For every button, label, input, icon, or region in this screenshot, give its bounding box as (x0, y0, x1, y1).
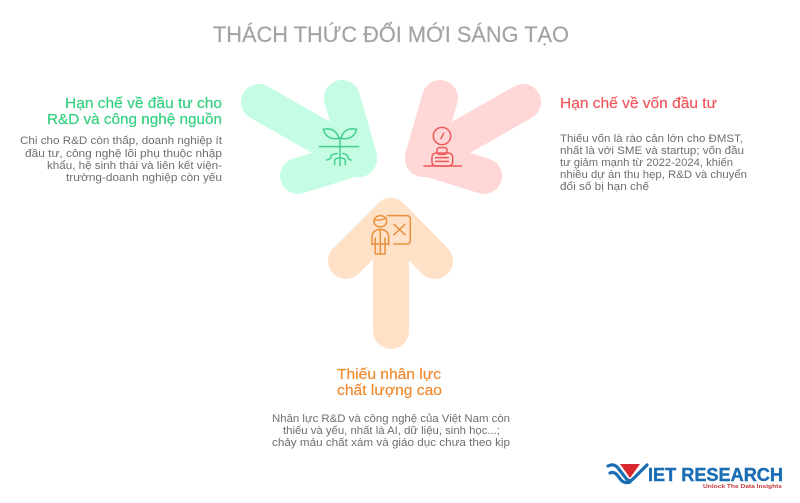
text block: green heading: Hạn chế về đầu tư cho (65, 95, 222, 112)
text block: orange heading: chất lượng cao (337, 382, 442, 399)
icon: logo V mark (608, 464, 647, 483)
icon: person at board (372, 216, 410, 254)
text block: green description (20, 135, 222, 184)
logo tagline: Unlock The Data Insights (703, 484, 782, 490)
text block: red heading: Hạn chế về vốn đầu tư (560, 95, 717, 112)
logo: Viet Research (608, 464, 783, 490)
arrow: green pointing to centre (259, 98, 359, 176)
text block: green description: Chi cho R&D còn thấp, doanh nghiệp ít (20, 135, 222, 147)
text block: green description: trường-doanh nghiệp còn yếu (66, 172, 222, 184)
title: THÁCH THỨC ĐỔI MỚI SÁNG TẠO (213, 22, 569, 47)
text block: orange heading (337, 366, 442, 399)
arrow: orange pointing up (346, 216, 435, 331)
text block: orange description: thiếu và yếu, nhất là AI, dữ liệu, sinh học...; (283, 425, 500, 437)
text block: orange heading: Thiếu nhân lực (337, 366, 442, 383)
text block: red description: nhiều dự án thu hẹp, R&D và chuyển (560, 169, 747, 181)
text block: red description: đổi số bị hạn chế (560, 181, 649, 193)
text block: green heading (47, 95, 222, 128)
text block: red description: tư giảm mạnh từ 2022-2024, khiến (560, 157, 733, 169)
text block: green description: đầu tư, công nghệ lõi phụ thuộc nhập (25, 148, 222, 160)
text block: green description: khẩu, hệ sinh thái và liên kết viện- (47, 160, 222, 172)
text block: red description (560, 133, 747, 193)
icon: gauge above laptop bag (424, 127, 461, 166)
text block: red description: Thiếu vốn là rào cản lớn cho ĐMST, (560, 133, 743, 145)
text block: orange description: chảy máu chất xám và giáo dục chưa theo kịp (272, 437, 510, 449)
text block: orange description: Nhân lực R&D và công nghệ của Việt Nam còn (272, 413, 510, 425)
text block: green heading: R&D và công nghệ nguồn (47, 111, 222, 128)
icon: plant with roots (319, 129, 359, 166)
arrow: red pointing to centre (423, 98, 523, 176)
text block: orange description (272, 413, 510, 449)
text block: red description: nhất là với SME và startup; vốn đầu (560, 145, 744, 157)
logo wordmark: IET RESEARCH (648, 465, 783, 485)
